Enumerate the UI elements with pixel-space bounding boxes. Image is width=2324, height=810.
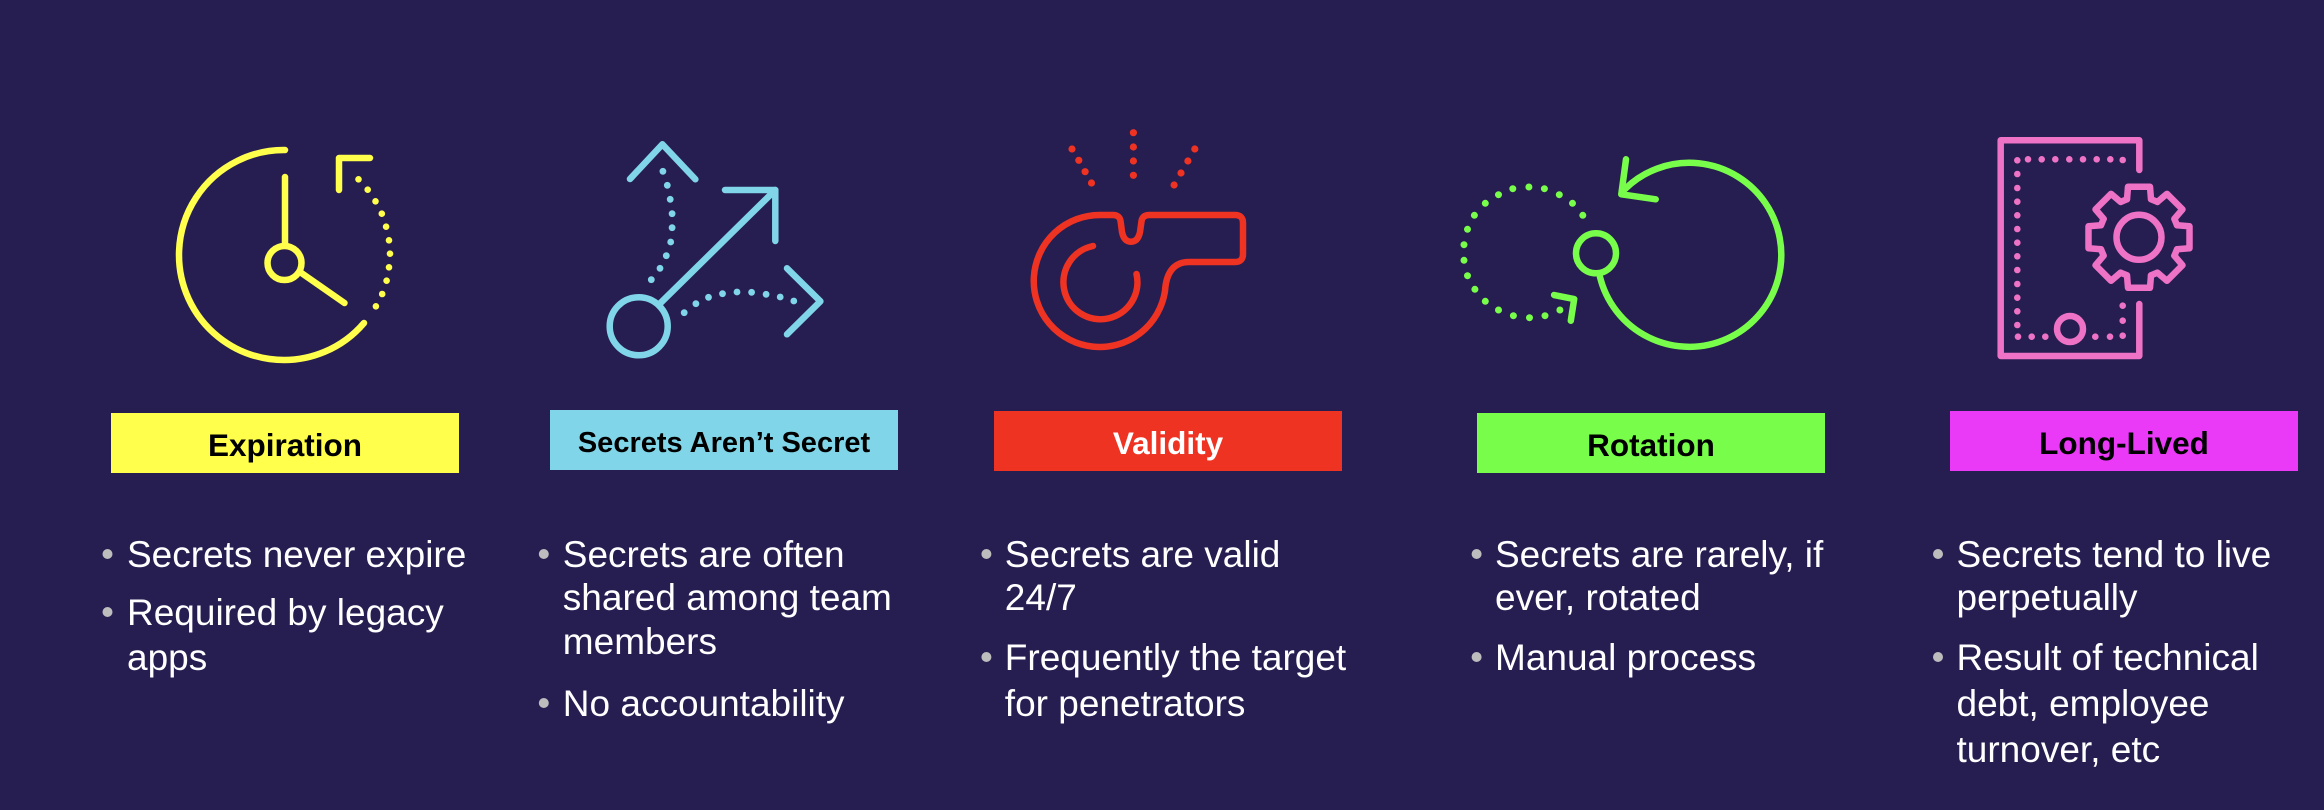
text block: Secrets Aren't Secret bullets: No accountability (563, 683, 845, 724)
text block: Validity bullets: Secrets are valid (1005, 534, 1280, 575)
heading: Secrets Aren't Secret: Secrets Aren’t Secret (578, 427, 870, 459)
icon: clock with dotted return arrow (179, 150, 393, 360)
heading: Rotation: Rotation (1587, 427, 1715, 463)
panel: Rotation (1460, 159, 1825, 678)
text block: Rotation bullets (1472, 534, 1824, 678)
text block: Secrets Aren't Secret bullets: shared among team (563, 577, 892, 618)
icon: whistle (1034, 129, 1243, 347)
panel: Validity (981, 129, 1347, 724)
text block: Long-Lived bullets (1933, 534, 2271, 770)
text block: Expiration bullets (102, 534, 466, 678)
text block: Long-Lived bullets: Result of technical (1956, 637, 2259, 678)
panel: Secrets Aren't Secret (539, 144, 898, 724)
text block: Long-Lived bullets: Secrets tend to live (1956, 534, 2271, 575)
text block: Expiration bullets: Secrets never expire (127, 534, 466, 575)
icon: device with gear (2001, 140, 2190, 356)
heading: Expiration: Expiration (208, 427, 362, 463)
text block: Long-Lived bullets: debt, employee (1956, 683, 2210, 724)
heading: Long-Lived: Long-Lived (2039, 425, 2209, 461)
panel: Expiration (102, 150, 466, 678)
text block: Validity bullets: Frequently the target (1005, 637, 1347, 678)
text block: Secrets Aren't Secret bullets: members (563, 621, 717, 662)
icon: rotation arrows (1460, 159, 1781, 347)
text block: Validity bullets: for penetrators (1005, 683, 1245, 724)
icon: branching arrows (610, 144, 820, 355)
panel: Long-Lived (1933, 140, 2298, 770)
text block: Validity bullets: 24/7 (1005, 577, 1077, 618)
heading: Rotation (1477, 413, 1825, 473)
heading: Validity (994, 411, 1342, 471)
heading: Expiration (111, 413, 459, 473)
text block: Secrets Aren't Secret bullets (539, 534, 892, 724)
heading: Validity: Validity (1113, 425, 1224, 461)
heading: Long-Lived (1950, 411, 2298, 471)
heading: Secrets Aren't Secret (550, 410, 898, 470)
text block: Long-Lived bullets: turnover, etc (1956, 729, 2160, 770)
text block: Expiration bullets: apps (127, 637, 207, 678)
text block: Secrets Aren't Secret bullets: Secrets are often (563, 534, 845, 575)
text block: Expiration bullets: Required by legacy (127, 592, 444, 633)
text block: Long-Lived bullets: perpetually (1956, 577, 2138, 618)
text block: Rotation bullets: Secrets are rarely, if (1495, 534, 1824, 575)
text block: Rotation bullets: ever, rotated (1495, 577, 1701, 618)
text block: Validity bullets (981, 534, 1347, 724)
text block: Rotation bullets: Manual process (1495, 637, 1756, 678)
